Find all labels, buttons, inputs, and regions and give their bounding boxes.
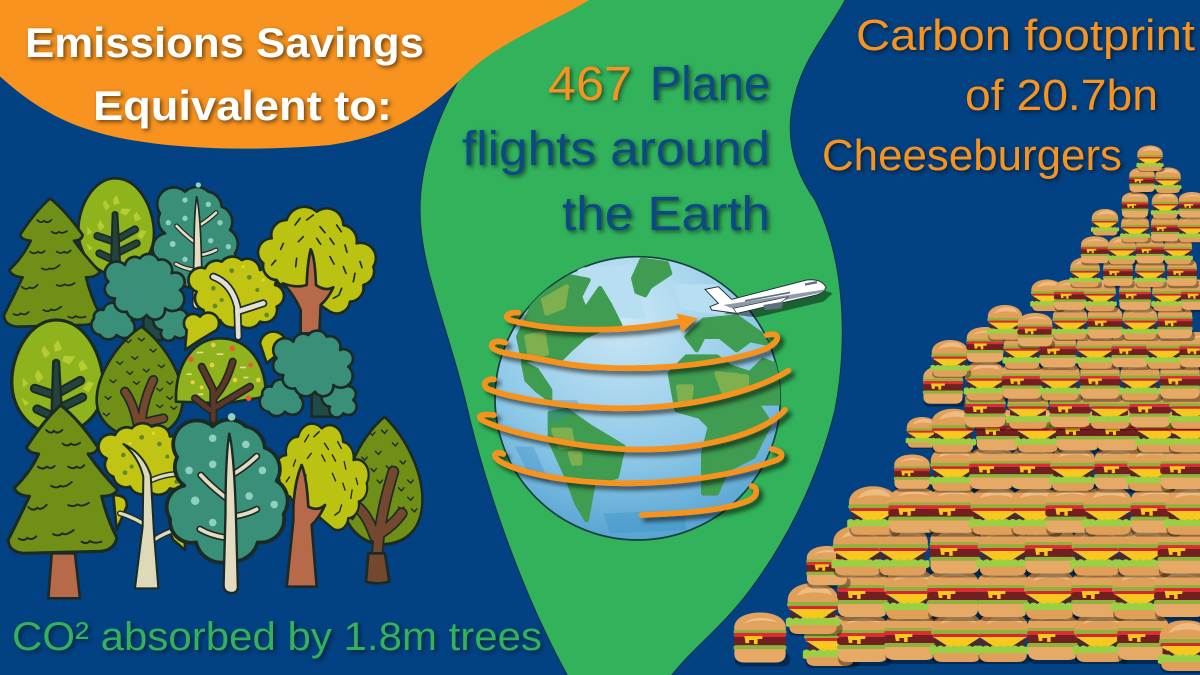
panel: orange heading blob xyxy=(0,0,597,149)
text: carbon footprint of cheeseburgers: of 20.7bn xyxy=(965,71,1158,120)
light green tree lower xyxy=(12,320,103,435)
text: 467 plane flights around the Earth: 467 xyxy=(548,58,632,111)
illustration: pile of cheeseburgers xyxy=(786,146,1200,673)
illustration: globe with orbit and plane xyxy=(480,257,833,540)
chevron tree lower xyxy=(343,417,422,583)
illustration: forest of trees xyxy=(4,178,422,598)
text: CO2 absorbed by trees: CO² absorbed by 1.8m trees xyxy=(12,615,542,659)
text: 467 plane flights around the Earth xyxy=(462,58,770,241)
yellow dotted tree upper xyxy=(188,257,284,337)
apple tree xyxy=(176,338,266,420)
illustration: single cheeseburger xyxy=(734,612,790,667)
orbit spiral xyxy=(480,313,788,515)
teal dotted tree lower xyxy=(167,413,288,593)
chevron tree xyxy=(97,327,183,438)
text: carbon footprint of cheeseburgers xyxy=(822,11,1195,180)
text: 467 plane flights around the Earth: the Earth xyxy=(562,188,770,241)
text: carbon footprint of cheeseburgers: Cheeseburgers xyxy=(822,131,1122,180)
fir tree upper xyxy=(4,198,100,327)
fir tree lower with trunk xyxy=(8,405,118,598)
cloud tree lower xyxy=(260,331,357,417)
small yellow foliage behind apple tree xyxy=(184,313,287,363)
text: carbon footprint of cheeseburgers: Carbon footprint xyxy=(856,11,1195,60)
text: 467 plane flights around the Earth: Plane xyxy=(650,58,770,111)
yellow leafy tree upper xyxy=(258,207,376,333)
yellow leafy tree lower xyxy=(275,423,369,587)
panel: green blob xyxy=(420,0,848,675)
heading: Emissions Savings Equivalent to: Emissions Savings xyxy=(25,19,424,66)
globe xyxy=(495,257,780,540)
yellow dotted tree lower xyxy=(98,423,194,588)
heading: Emissions Savings Equivalent to xyxy=(25,19,424,129)
heading: Emissions Savings Equivalent to: Equivalent to: xyxy=(93,82,392,129)
orbit arrow head xyxy=(677,313,697,333)
text: 467 plane flights around the Earth: flights around xyxy=(462,123,770,176)
airplane xyxy=(705,280,833,317)
